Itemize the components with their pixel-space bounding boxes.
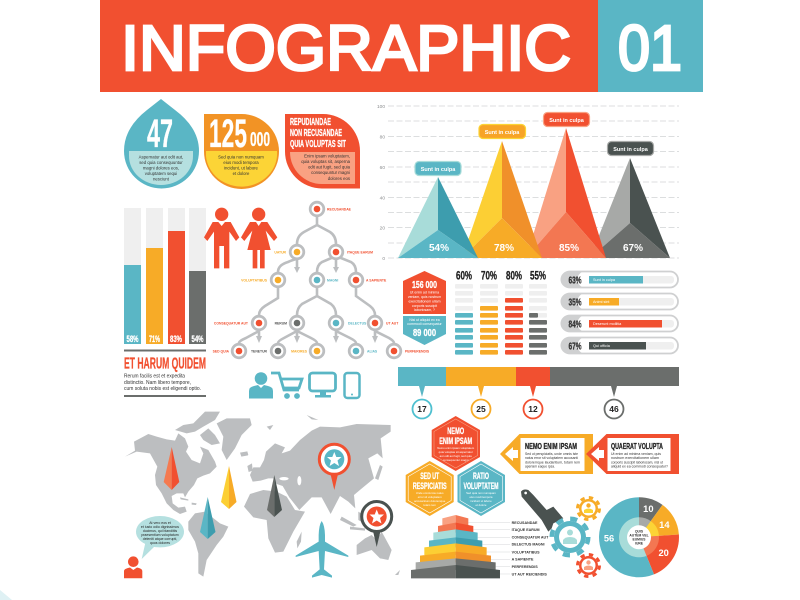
hexagon stats: commodi consequatur	[407, 322, 443, 326]
donut chart: QUIS	[635, 530, 644, 534]
hexagon: ratio voluptatem	[458, 461, 505, 516]
pyramid chart: 100	[377, 104, 385, 110]
hexagon: nemo enim ipsam: Nemo enim ipsam voluptatem	[437, 446, 475, 450]
flow tree diagram: PERFERENDIS	[405, 350, 430, 354]
stacked segment chart: 55%	[530, 270, 546, 282]
stacked segment chart: 70%	[481, 270, 497, 282]
teal drop callout: sed quia consequuntur	[139, 160, 183, 165]
donut chart: 56	[604, 533, 614, 543]
hexagon: ratio voluptatem: incidunt ut labore	[470, 499, 492, 503]
red title callout: consequuntur magni	[311, 170, 350, 175]
flow tree diagram: ITAQUE EARUM	[347, 250, 373, 254]
donut chart: AUTEM VEL	[629, 534, 649, 538]
flow tree diagram: VOLUPTATIBUS	[241, 278, 268, 282]
icon: woman	[241, 208, 277, 268]
vertical percentage bars	[124, 208, 206, 344]
pyramid: teal 54%: 54%	[429, 243, 449, 254]
heading: et harum quidem: ET HARUM QUIDEM	[124, 356, 206, 372]
stacked segment chart: 60%	[456, 270, 472, 282]
arrow box: nemo enim ipsam: NEMO ENIM IPSAM	[525, 441, 577, 451]
red title callout	[285, 114, 360, 188]
progress pills	[560, 271, 678, 354]
donut chart: 10	[643, 504, 654, 514]
flow tree diagram: MAIORES	[291, 350, 308, 354]
red title callout: quia voluptas sit, asperna	[301, 159, 351, 164]
gear: red	[578, 554, 600, 576]
hexagon: nemo enim ipsam: NEMO	[447, 426, 464, 436]
arrow box: nemo enim ipsam: natus error sit voluptatem accusanti	[525, 456, 578, 460]
pyramid chart: 60	[380, 165, 385, 171]
progress pills: 67%	[568, 342, 582, 352]
pyramid: red 85%: Sunt in culpa	[549, 118, 585, 124]
flow tree diagram: RERUM	[275, 322, 287, 326]
orange number callout	[204, 112, 279, 189]
hexagon stats: veniam, quis nostrum	[408, 295, 441, 299]
speech bubble: At vero eos et	[149, 521, 171, 525]
horizontal segmented bar with markers: 17	[417, 404, 427, 414]
layered pyramid with labels	[411, 515, 549, 578]
layered pyramid with labels: ITAQUE EARUM	[512, 528, 540, 532]
layered pyramid with labels: DELECTUS MAGNI	[512, 543, 545, 547]
progress pills: Animi sint	[593, 300, 610, 304]
header banner: INFOGRAPHIC	[121, 12, 571, 84]
pyramid: grey 67%: 67%	[623, 243, 643, 254]
stacked segment chart	[455, 270, 547, 355]
flow tree diagram: A SAPIENTE	[366, 278, 387, 282]
speech bubble: et iusto odio dignissimos	[141, 525, 179, 529]
teal drop callout: 47	[147, 112, 173, 156]
progress pills: Qui officia	[593, 344, 611, 348]
vertical percentage bars: 71%	[149, 334, 160, 344]
hexagon: sed ut respiciatis: SED UT	[420, 471, 439, 481]
flow tree diagram: DELECTUS	[348, 322, 367, 326]
teal drop callout: magni dolores eos,	[143, 166, 179, 170]
arrow box: nemo enim ipsam: doloremque laudantium, totam rem	[525, 460, 580, 464]
header banner	[100, 0, 703, 92]
pyramid: grey 67%	[590, 142, 670, 258]
red title callout: REPUDIANDAE	[290, 116, 331, 128]
pyramid: teal 54%	[398, 162, 478, 258]
layered pyramid with labels: A SAPIENTE	[512, 558, 534, 562]
hexagon stats: Nisi ut aliquid ex ea	[409, 318, 440, 322]
progress pills: 84%	[568, 320, 582, 330]
arrow box: quaerat volupta: nostrum exercitationem ullam	[611, 456, 659, 460]
flow tree diagram: UT AUT	[386, 322, 399, 326]
hexagon: nemo enim ipsam: consequuntur magni	[443, 458, 469, 462]
vertical percentage bars: 83%	[170, 334, 182, 344]
progress pills: 35%	[568, 298, 582, 308]
pyramid: red 85%	[526, 112, 606, 258]
horizontal segmented bar with markers: 46	[609, 404, 619, 414]
pyramid: yellow 78%	[462, 124, 542, 258]
red title callout: QUIA VOLUPTAS SIT	[290, 138, 346, 150]
orange number callout: eius modi tempora	[223, 160, 259, 165]
arrow box: quaerat volupta: aliquid ex ea commodi consequatur?	[611, 464, 668, 468]
orange number callout: 000	[250, 129, 270, 151]
arrow box: quaerat volupta: QUAERAT VOLUPTA	[611, 441, 663, 451]
hexagon: ratio voluptatem: Sed quia non numquam	[466, 491, 497, 495]
progress pills: Sunt in culpa	[593, 278, 616, 282]
orange number callout: Sed quia non numquam	[218, 154, 264, 160]
flow tree diagram: TENETUR	[251, 350, 268, 354]
world map: africa, eurasia, australia	[240, 415, 400, 575]
teal drop callout: nesciunt	[153, 176, 170, 182]
arrow box: nemo enim ipsam: aperiam eaque ipsa.	[525, 464, 555, 468]
donut chart: 14	[659, 520, 670, 530]
pyramid chart: 20	[380, 226, 385, 232]
hexagon: sed ut respiciatis: totam rem	[423, 503, 437, 507]
world map: americas and greenland	[125, 412, 252, 577]
icon: phone	[344, 373, 360, 398]
hexagon stats	[403, 271, 446, 345]
orange number callout: 125	[209, 112, 247, 156]
stacked segment chart: 80%	[506, 270, 522, 282]
map pin: red star	[319, 444, 349, 490]
pyramid chart: 40	[380, 196, 385, 202]
layered pyramid with labels: VOLUPTATIBUS	[512, 550, 540, 554]
hexagon: nemo enim ipsam: aut odit aut fugit, sed quia	[440, 454, 472, 458]
hexagon: nemo enim ipsam: ENIM IPSAM	[439, 436, 472, 446]
icon: user	[249, 372, 273, 398]
flow tree diagram: RECUSANDAE	[327, 208, 352, 212]
gear: teal	[552, 519, 588, 555]
red title callout: Enim ipsam voluptatem,	[304, 154, 350, 158]
layered pyramid with labels: RECUSANDAE	[512, 521, 538, 525]
speech bubble: ducimus, qui blanditiis	[143, 529, 177, 533]
flow tree diagram: SED QUIA	[213, 350, 230, 354]
donut chart	[599, 497, 679, 577]
heading: et harum quidem: distinctio. Nam libero tempore,	[124, 380, 191, 386]
hexagon stats: exercitationem ullam	[408, 300, 441, 304]
speech bubble	[136, 516, 184, 559]
red title callout: NON RECUSANDAE	[290, 127, 342, 139]
flow tree diagram	[213, 202, 430, 358]
layered pyramid with labels: PERFERENDIS	[512, 565, 538, 569]
pyramid: red 85%: 85%	[559, 243, 579, 254]
hexagon stats: laboriosam, ?	[414, 308, 435, 312]
horizontal segmented bar with markers: 12	[528, 404, 538, 414]
hexagon: ratio voluptatem: et dolore	[476, 503, 487, 507]
hexagon: sed ut respiciatis: RESPICIATIS	[413, 481, 447, 491]
map markers: diamond pins	[164, 447, 282, 539]
donut chart: IURE	[635, 542, 644, 546]
pyramid: teal 54%: Sunt in culpa	[421, 167, 456, 173]
icon: monitor	[310, 373, 336, 398]
progress pills: 63%	[568, 276, 582, 286]
vertical percentage bars: 58%	[126, 334, 138, 344]
heading: et harum quidem: cum soluta nobis est eligendi optio.	[124, 386, 201, 392]
header banner: 01	[618, 12, 682, 84]
teal drop callout: Aspernatur aut odit aut,	[139, 154, 183, 160]
hexagon stats: corporis suscipit	[412, 304, 437, 308]
red title callout: odit aut fugit, sed quia	[308, 164, 351, 170]
layered pyramid with labels: CONSEQUATUR AUT	[512, 536, 549, 540]
pyramid chart: 80	[380, 134, 385, 140]
red title callout: dolores eos	[328, 176, 350, 181]
donut chart: 20	[658, 548, 669, 558]
hexagon: ratio voluptatem: RATIO	[473, 471, 489, 481]
vertical percentage bars: 54%	[192, 334, 204, 344]
speech bubble: deleniti atque corrupti,	[143, 537, 177, 541]
hexagon: sed ut respiciatis: error sit voluptatem	[418, 495, 442, 499]
flow tree diagram: ALIAS	[367, 350, 378, 354]
orange number callout: et dolore	[233, 171, 250, 176]
horizontal segmented bar with markers	[398, 367, 679, 418]
hexagon stats: Ut enim ad minima	[410, 290, 439, 294]
arrow box: quaerat volupta: corporis suscipit laboriosam, nisi ut	[611, 460, 663, 464]
hexagon stats: 89 000	[413, 328, 436, 339]
icon: man	[204, 208, 239, 268]
speech bubble: quos dolores	[150, 541, 170, 545]
pyramid: yellow 78%: Sunt in culpa	[485, 130, 520, 136]
pyramid chart	[377, 104, 679, 262]
icon: airplane	[296, 521, 348, 578]
pyramid chart: 0	[382, 256, 385, 262]
arrow box: quaerat volupta: Ut enim ad minima veniam, quis	[611, 452, 661, 456]
icon: cart	[271, 373, 302, 398]
progress pills: Deserunt mollitia	[593, 322, 622, 326]
flow tree diagram: UATUR	[274, 250, 287, 254]
arrow box: quaerat volupta	[586, 434, 679, 474]
horizontal segmented bar with markers: 25	[476, 404, 486, 414]
teal drop callout	[124, 99, 199, 188]
hexagon: ratio voluptatem: eius modi tempora	[469, 495, 493, 499]
donut chart: EUMIUS	[633, 538, 646, 542]
heading: et harum quidem	[124, 350, 206, 397]
arrow box: nemo enim ipsam	[500, 434, 593, 474]
icon: wrench	[521, 489, 563, 532]
pyramid: grey 67%: Sunt in culpa	[613, 147, 649, 153]
hexagon stats: 156 000	[412, 280, 437, 291]
hexagon: sed ut respiciatis: Unde omnis iste natus	[416, 491, 444, 495]
gear: orange	[578, 498, 600, 520]
hexagon: sed ut respiciatis: accusantium doloremque	[414, 499, 446, 503]
speech bubble: praesentium voluptatum	[141, 533, 179, 537]
heading: et harum quidem: Rerum facilis est et expedita	[124, 374, 185, 380]
teal drop callout: voluptatem sequi	[145, 171, 177, 176]
layered pyramid with labels: UT AUT REICIENDIS	[512, 572, 547, 576]
icon: speaker person	[124, 556, 142, 578]
flow tree diagram: MAGNI	[327, 278, 338, 282]
orange number callout: incidunt, ut labore	[224, 166, 259, 170]
hexagon: nemo enim ipsam	[432, 416, 480, 471]
map pin: dark star	[362, 502, 392, 547]
flow tree diagram: CONSEQUATUR AUT	[214, 322, 249, 326]
hexagon: sed ut respiciatis	[406, 461, 454, 516]
arrow box: nemo enim ipsam: Sed ut perspiciatis, unde omnis iste	[525, 452, 578, 456]
pyramid: yellow 78%: 78%	[494, 243, 514, 254]
hexagon: ratio voluptatem: VOLUPTATEM	[464, 481, 498, 491]
hexagon: nemo enim ipsam: quia voluptas sit aspernatur	[439, 450, 473, 454]
